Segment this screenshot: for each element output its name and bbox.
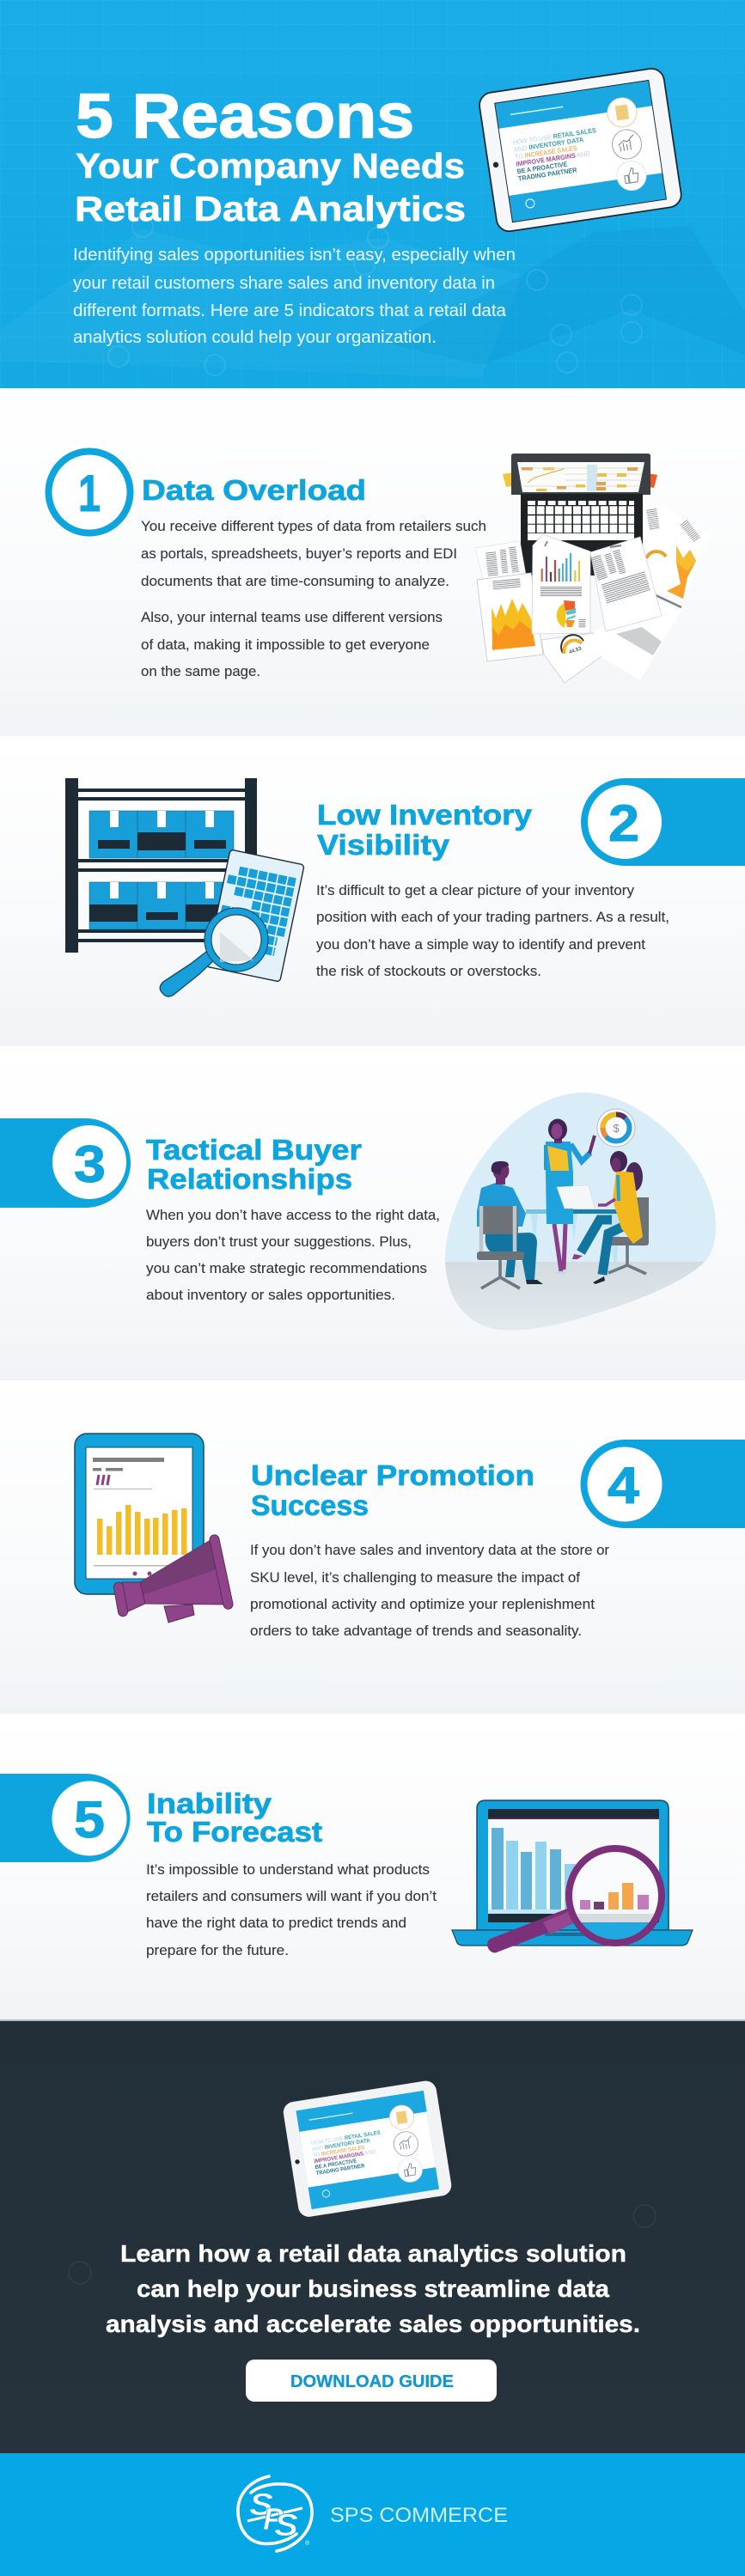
icon: tablet showing the guide cover: TRADING PARTNER	[315, 2163, 365, 2177]
body text: orders to take advantage of trends and seasonality.	[250, 1623, 582, 1639]
number badge 5	[0, 1774, 131, 1862]
report: area chart sheet	[477, 573, 543, 661]
logo: SPS Commerce mark: ®	[305, 2540, 310, 2547]
body text	[146, 1861, 437, 1958]
panel: call to action	[0, 2019, 745, 2453]
body text: you don’t have a simple way to identify and prevent	[316, 936, 645, 953]
brand name: SPS COMMERCE	[330, 2504, 508, 2527]
number badge 2: 2	[608, 795, 639, 852]
button: download guide	[246, 2360, 497, 2402]
logo: SPS Commerce mark: P	[263, 2501, 284, 2536]
call to action text: can help your business streamline data	[137, 2275, 609, 2302]
title: Retail Data Analytics	[75, 189, 466, 228]
body text: about inventory or sales opportunities.	[146, 1287, 395, 1303]
heading	[251, 1459, 534, 1521]
title	[75, 82, 466, 228]
body text: If you don’t have sales and inventory data at the store or	[250, 1542, 609, 1558]
heading: Inability	[147, 1787, 272, 1819]
megaphone	[113, 1534, 234, 1623]
body text: promotional activity and optimize your replenishment	[250, 1596, 595, 1612]
body text: SKU level, it’s challenging to measure the impact of	[250, 1569, 580, 1586]
icon: tablet showing the guide cover: IMPROVE MARGINS AND	[516, 149, 591, 168]
heading	[146, 1134, 362, 1195]
icon: tablet showing the guide cover: HOW TO USE RETAIL SALES	[512, 126, 596, 147]
icon: tablet showing the guide cover: AND INVENTORY DATA	[312, 2138, 370, 2153]
magnifying glass	[487, 1848, 662, 1952]
number badge 1: 1	[78, 465, 101, 522]
illustration: team meeting on a blob	[445, 1093, 716, 1331]
body text: retailers and consumers will want if you don’t	[146, 1888, 437, 1904]
panel: reason 3 tactical buyer relationships	[0, 1046, 745, 1380]
icon: donut chart with dollar sign	[597, 1109, 635, 1147]
sticky notes	[503, 472, 657, 488]
inventory sheet	[206, 850, 304, 982]
heading	[147, 1787, 322, 1848]
icon: donut chart with dollar sign: $	[614, 1122, 620, 1135]
body text: You receive different types of data from retailers such	[141, 518, 486, 534]
body text: buyers don’t trust your suggestions. Plus,	[146, 1233, 412, 1250]
illustration: tablet bar chart and megaphone	[75, 1434, 234, 1623]
report: orange area chart sheet	[646, 524, 700, 599]
number badge 3	[0, 1118, 131, 1208]
report: right text sheet	[590, 537, 662, 631]
body text: When you don’t have access to the right data,	[146, 1207, 440, 1223]
logo: SPS Commerce mark	[238, 2476, 312, 2551]
heading	[317, 799, 533, 861]
report: gauge sheet: 44.53	[569, 646, 583, 655]
illustration: warehouse shelves with inventory sheet and magnifier	[65, 778, 304, 996]
report: lower right sheet	[593, 595, 681, 680]
report: center sheet with bars and pie	[532, 534, 590, 634]
body text: Also, your internal teams use different versions	[141, 609, 443, 625]
number badge 4: 4	[608, 1457, 640, 1514]
call to action text	[106, 2240, 640, 2337]
button: download guide: DOWNLOAD GUIDE	[290, 2372, 454, 2391]
intro text: Identifying sales opportunities isn’t easy, especially when	[73, 246, 516, 265]
call to action text: Learn how a retail data analytics solution	[120, 2240, 626, 2267]
body text: the risk of stockouts or overstocks.	[316, 963, 541, 979]
laptop on table	[557, 1185, 595, 1209]
number badge 5: 5	[74, 1791, 105, 1848]
number badge 1	[48, 452, 131, 533]
intro text: your retail customers share sales and inventory data in	[73, 274, 495, 293]
intro text	[73, 246, 516, 347]
body text: as portals, spreadsheets, buyer’s reports and EDI	[141, 545, 457, 562]
panel: hero header	[0, 0, 745, 388]
person: seated man	[477, 1161, 543, 1288]
boxes: bottom row	[89, 882, 234, 929]
heading: Tactical Buyer	[146, 1134, 362, 1166]
icon: tablet showing the guide cover: TO INCREASE SALES	[515, 144, 577, 161]
icon: tablet showing the guide cover: BE A PROACTIVE	[516, 161, 568, 175]
laptop	[452, 1800, 693, 1946]
panel: reason 5 inability to forecast	[0, 1714, 745, 2021]
bar chart	[97, 1505, 187, 1555]
tablet	[75, 1434, 204, 1594]
panel: reason 1 data overload	[0, 388, 745, 736]
icon: tablet showing the guide cover: TRADING PARTNER	[517, 166, 577, 183]
body text	[316, 882, 669, 979]
body text: on the same page.	[141, 663, 260, 679]
icon: tablet showing the guide cover: TO INCREASE SALES	[313, 2145, 366, 2159]
icon: tablet showing the guide cover: HOW TO USE RETAIL SALES	[311, 2130, 382, 2147]
icon: tablet showing the guide cover	[282, 2080, 453, 2219]
blob backdrop	[445, 1093, 716, 1331]
icon: tablet showing the guide cover	[478, 67, 683, 233]
bar chart	[492, 1828, 576, 1909]
number badge 4	[581, 1440, 745, 1528]
logo: SPS Commerce mark: S	[274, 2507, 298, 2543]
heading: Low Inventory	[317, 799, 533, 831]
heading: Relationships	[147, 1163, 352, 1195]
body text: position with each of your trading partners. As a result,	[316, 909, 669, 925]
body text: It’s impossible to understand what products	[146, 1861, 430, 1878]
body text: have the right data to predict trends and	[146, 1915, 406, 1931]
title: 5 Reasons	[76, 82, 414, 151]
intro text: analytics solution could help your organization.	[73, 328, 437, 347]
icon: tablet showing the guide cover: AND INVENTORY DATA	[513, 136, 584, 154]
boxes: top row	[89, 811, 234, 858]
panel: footer with logo	[0, 2453, 745, 2576]
report: back right sheet	[642, 507, 710, 599]
body text	[141, 518, 486, 679]
illustration: laptop chart with magnifier	[452, 1800, 693, 1952]
heading: Visibility	[317, 829, 450, 861]
heading: Data Overload	[142, 474, 366, 506]
icon: tablet showing the guide cover: BE A PROACTIVE	[314, 2158, 357, 2171]
heading: Unclear Promotion	[251, 1459, 534, 1491]
body text: documents that are time-consuming to analyze.	[141, 573, 449, 589]
person: standing woman	[546, 1118, 595, 1274]
heading: To Forecast	[147, 1816, 322, 1848]
person: seated woman	[572, 1151, 649, 1284]
logo: SPS Commerce mark: S	[249, 2487, 273, 2522]
panel: reason 4 unclear promotion success	[0, 1380, 745, 1714]
number badge 2	[581, 778, 745, 866]
report: gauge sheet	[541, 633, 610, 683]
body text	[146, 1207, 440, 1303]
panel: reason 2 low inventory visibility	[0, 739, 745, 1046]
title: Your Company Needs	[76, 146, 465, 186]
report: list sheet	[475, 541, 526, 582]
body text: It’s difficult to get a clear picture of your inventory	[316, 882, 635, 898]
illustration: laptop and scattered reports	[475, 454, 710, 683]
number badge 3: 3	[74, 1136, 106, 1193]
body text: you can’t make strategic recommendations	[146, 1260, 427, 1276]
laptop	[511, 454, 650, 575]
intro text: different formats. Here are 5 indicators that a retail data	[73, 301, 507, 320]
body text: of data, making it impossible to get everyone	[141, 636, 430, 653]
table and laptop	[526, 1209, 620, 1280]
icon: tablet showing the guide cover: IMPROVE MARGINS AND	[314, 2149, 376, 2165]
magnifying glass	[160, 908, 268, 996]
body text	[250, 1542, 609, 1639]
shelving unit	[65, 778, 257, 953]
call to action text: analysis and accelerate sales opportunities.	[106, 2311, 640, 2337]
heading: Success	[251, 1489, 369, 1521]
body text: prepare for the future.	[146, 1942, 289, 1958]
